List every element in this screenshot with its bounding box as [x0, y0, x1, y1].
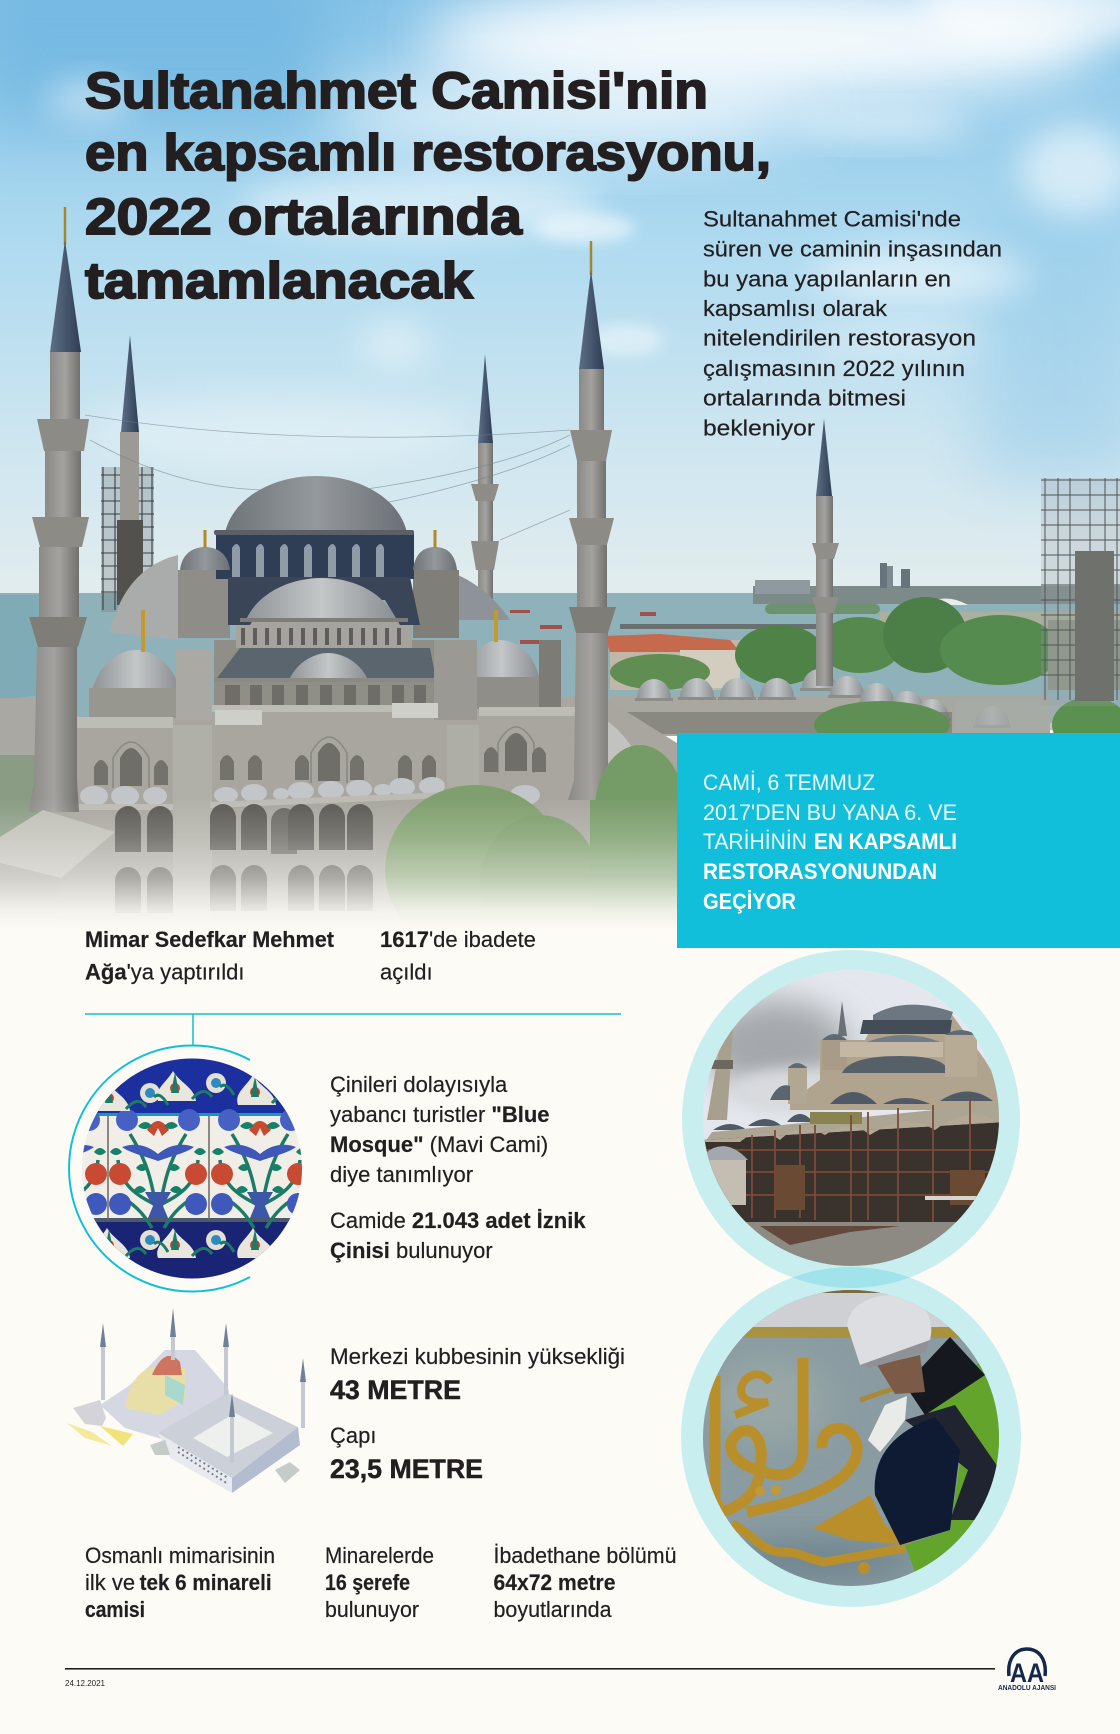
fact: prayer hall size: İbadethane bölümü — [494, 1543, 676, 1568]
calligraphy — [715, 1358, 905, 1562]
right scaffold and column — [1041, 478, 1120, 706]
architect text — [85, 927, 335, 984]
date: 24.12.2021 — [65, 1679, 106, 1688]
fact: sherefe: 16 şerefe — [325, 1570, 410, 1595]
row of small domes — [80, 777, 540, 806]
entrance ramp — [73, 1400, 106, 1426]
fact: prayer hall size — [494, 1543, 676, 1622]
courtyard arcade — [610, 669, 1120, 736]
title — [85, 62, 771, 309]
sea and far shore — [0, 563, 1120, 873]
photo: restoration scaffolding courtyard — [682, 950, 1020, 1288]
rear left minaret behind scaffold — [101, 335, 154, 612]
wall band — [705, 1103, 1005, 1142]
tile text: Camide 21.043 adet İznik — [330, 1208, 586, 1233]
intro paragraph: süren ve caminin inşasından — [703, 236, 1002, 261]
drum — [216, 533, 414, 579]
callout text: TARİHİNİN — [703, 829, 807, 854]
callout text: EN KAPSAMLI — [814, 829, 957, 854]
intro paragraph: kapsamlısı olarak — [703, 296, 888, 321]
turrets — [178, 570, 230, 638]
intro paragraph: bekleniyor — [703, 416, 815, 440]
foreground roof and trees — [0, 745, 677, 907]
callout text: 2017'DEN BU YANA 6. VE — [703, 800, 957, 825]
dome text: 23,5 METRE — [330, 1454, 483, 1484]
main dome — [225, 476, 407, 533]
fact: prayer hall size: 64x72 metre — [494, 1570, 616, 1595]
opening year text: açıldı — [380, 960, 433, 984]
fact: sherefe: bulunuyor — [325, 1597, 419, 1622]
ledges and balustrades — [76, 705, 578, 728]
hero photo: Sultanahmet Mosque against sky — [0, 0, 1120, 965]
helmet — [847, 1295, 931, 1365]
title: Sultanahmet Camisi'nin — [85, 62, 708, 119]
fact: six minarets: Osmanlı mimarisinin — [85, 1543, 275, 1568]
agency logo: AA — [1010, 1658, 1044, 1688]
opening year text — [380, 927, 536, 984]
prayer hall — [100, 1350, 230, 1440]
portico domes — [713, 1092, 993, 1130]
upper building mass — [790, 1012, 1000, 1110]
architect text: Ağa'ya yaptırıldı — [85, 960, 244, 984]
intro paragraph — [703, 206, 1002, 440]
dome text: Merkezi kubbesinin yüksekliği — [330, 1344, 625, 1369]
footer rule — [65, 1668, 995, 1670]
callout panel — [677, 733, 1120, 948]
gloves — [868, 1396, 907, 1452]
central semi dome — [246, 578, 396, 620]
piers — [173, 725, 212, 820]
central cascade — [214, 640, 436, 705]
fact: six minarets: camisi — [85, 1597, 145, 1622]
callout text: CAMİ, 6 TEMMUZ — [703, 770, 875, 795]
far shore trees and roofs — [604, 597, 1120, 690]
lower arches — [115, 806, 141, 852]
fact: six minarets: ilk ve — [85, 1570, 135, 1595]
fact: six minarets — [85, 1543, 275, 1622]
side half domes — [110, 555, 178, 640]
right dome group behind trees — [608, 722, 631, 764]
dome text: Çapı — [330, 1423, 376, 1448]
rear right minaret — [471, 354, 499, 603]
left minaret — [707, 1028, 733, 1120]
tile text — [330, 1072, 586, 1263]
corner domes — [93, 650, 179, 688]
ring arc — [69, 1046, 250, 1292]
side small domes — [180, 547, 230, 570]
worker body — [905, 1360, 1010, 1572]
agency logo — [998, 1649, 1056, 1692]
title: tamamlanacak — [85, 252, 474, 309]
tile text: Çinisi bulunuyor — [330, 1238, 493, 1263]
circular tile photo — [68, 1044, 302, 1292]
fact: six minarets: tek 6 minareli — [140, 1570, 272, 1595]
fade into paper — [0, 808, 677, 930]
fact: sherefe — [325, 1543, 434, 1622]
dome text: 43 METRE — [330, 1375, 461, 1405]
architect text: Mimar Sedefkar Mehmet — [85, 927, 335, 952]
shadows — [150, 1440, 300, 1483]
courtyard outer roof — [158, 1393, 298, 1478]
isometric mosque illustration — [67, 1308, 306, 1493]
intro paragraph: Sultanahmet Camisi'nde — [703, 206, 961, 232]
connector line — [85, 1014, 621, 1046]
fact: sherefe: Minarelerde — [325, 1543, 434, 1568]
sky with clouds — [0, 0, 1120, 600]
tile text: Çinileri dolayısıyla — [330, 1072, 508, 1097]
front walls — [158, 1433, 232, 1493]
callout text — [703, 770, 957, 914]
far right minaret — [812, 419, 839, 686]
dark roof band — [217, 648, 434, 678]
pavement — [700, 1222, 1005, 1272]
intro paragraph: bu yana yapılanların en — [703, 266, 951, 291]
arcade — [700, 1122, 1005, 1222]
outer lower wall — [40, 695, 680, 930]
tile text: yabancı turistler "Blue — [330, 1102, 550, 1127]
callout text: GEÇİYOR — [703, 889, 796, 914]
title: 2022 ortalarında — [85, 188, 523, 245]
fact: prayer hall size: boyutlarında — [494, 1597, 612, 1622]
agency logo: ANADOLU AJANSI — [998, 1683, 1056, 1692]
title: en kapsamlı restorasyonu, — [85, 124, 771, 181]
spire — [838, 1001, 847, 1036]
front right minaret — [568, 241, 616, 800]
callout text: RESTORASYONUNDAN — [703, 859, 937, 884]
opening year text: 1617'de ibadete — [380, 927, 536, 952]
photo: worker restoring gold calligraphy — [681, 1267, 1021, 1607]
intro paragraph: nitelendirilen restorasyon — [703, 326, 976, 351]
kiosk — [703, 1146, 748, 1160]
intro paragraph: ortalarında bitmesi — [703, 386, 906, 411]
tile text: Mosque" (Mavi Cami) — [330, 1132, 548, 1157]
tile text: diye tanımlıyor — [330, 1162, 473, 1187]
minarets — [103, 1335, 303, 1463]
upper arched windows — [113, 742, 149, 788]
intro paragraph: çalışmasının 2022 yılının — [703, 356, 965, 381]
mosque main body — [40, 476, 680, 930]
courtyard inner — [193, 1413, 273, 1457]
cables — [85, 415, 570, 540]
front left minaret — [29, 207, 89, 812]
dome text — [330, 1344, 625, 1484]
yellow ground — [67, 1423, 112, 1446]
